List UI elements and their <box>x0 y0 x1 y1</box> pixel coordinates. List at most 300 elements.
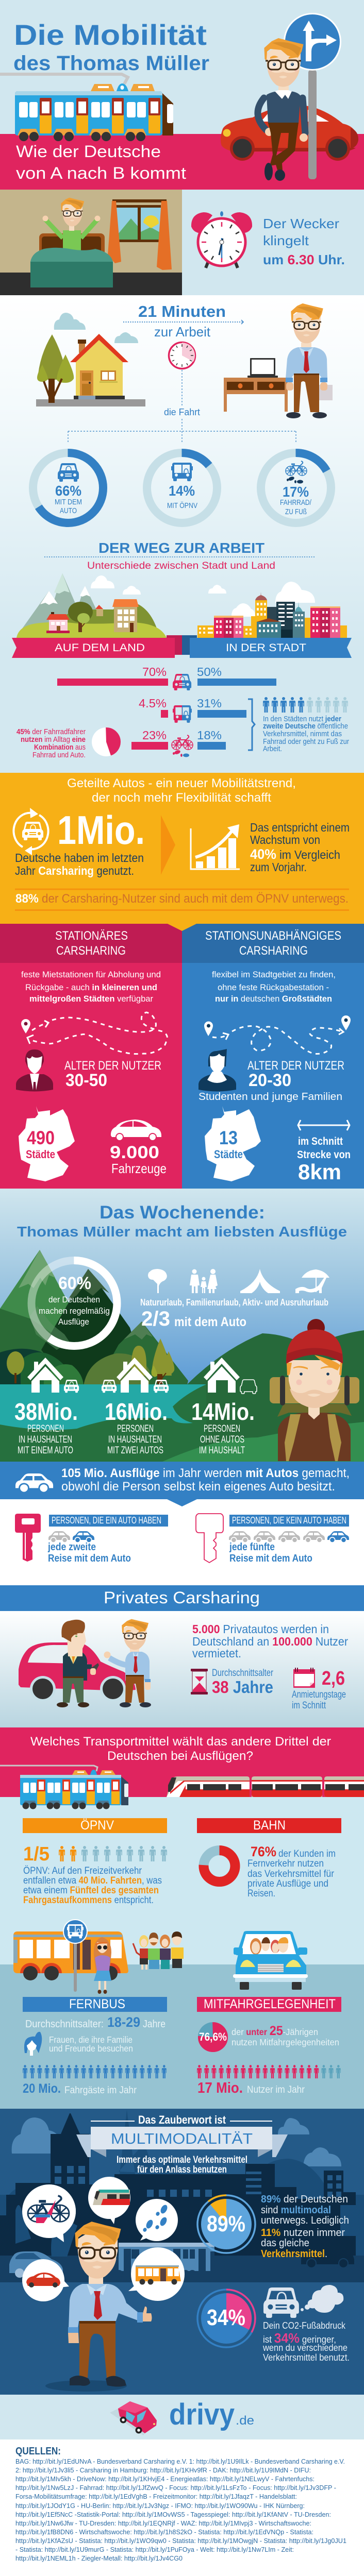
heading ribbon: MULTIMODALITÄT <box>111 2131 253 2147</box>
sources <box>15 2446 346 2562</box>
heading ribbon: für den Anlass benutzen <box>137 2164 227 2175</box>
ring chart: 60 percent: Ausflüge <box>58 1317 89 1327</box>
route map <box>21 1012 167 1054</box>
hero subtitle <box>16 142 186 182</box>
bedroom scene <box>0 190 182 295</box>
text <box>247 1844 336 1899</box>
text: private Ausflüge und <box>247 1878 328 1889</box>
donut: bike and walking 17%: 17% <box>283 484 309 500</box>
heading bar <box>0 1585 364 1611</box>
callout text <box>61 1466 350 1494</box>
donut: car 66% <box>33 453 103 523</box>
sources list: BAG: http://bit.ly/1EdUNvA - Bundesverband Carsharing e.V. 1: http://bit.ly/1U9IlLk - Bundesverband Carsharing e.V. <box>15 2458 345 2465</box>
note: bike and car: Kombination aus <box>34 743 86 752</box>
night skyline <box>0 2110 364 2282</box>
21 minutes heading: zur Arbeit <box>154 324 211 340</box>
stat: average age: Durchschnittsalter <box>212 1668 274 1679</box>
banner: city: IN DER STADT <box>226 642 306 654</box>
cars: every second <box>48 1531 94 1542</box>
arrow: distance <box>298 1120 350 1130</box>
wake-up text: um 6.30 Uhr. <box>263 252 345 267</box>
car row <box>57 668 276 690</box>
bubble: bike <box>22 2184 76 2242</box>
woman waiting <box>94 1937 111 1994</box>
bus stop sign <box>63 1919 88 1992</box>
heading <box>205 929 341 958</box>
note: cities: zweite Deutsche öffentliche <box>263 722 348 731</box>
growth text <box>250 821 350 874</box>
label <box>49 1515 168 1527</box>
stat: average age <box>212 1668 274 1697</box>
icon: family <box>190 1269 218 1293</box>
carsharing comparison section <box>0 924 364 1189</box>
note: cities: In den Städten nutzt jeder <box>263 715 341 723</box>
note: cities <box>263 715 349 753</box>
stat: 1 million <box>15 807 145 877</box>
heading bar: Privates Carsharing <box>104 1588 260 1607</box>
panel: public transport <box>23 1818 167 1906</box>
sources list: Forsa-Mobilitätsumfrage: http://bit.ly/1EdVghB - Freizeitmonitor: http://bit.ly/1JfaqzT - Handelsblatt: <box>15 2493 297 2500</box>
text: das Verkehrsmittel für <box>247 1869 335 1879</box>
hiker <box>270 1319 359 1461</box>
description <box>212 970 336 1004</box>
car row: 50% <box>197 665 222 679</box>
callout: 88 percent: 88% der Carsharing-Nutzer sind auch mit dem ÖPNV unterwegs. <box>15 892 349 906</box>
die Fahrt label: die Fahrt <box>164 407 200 417</box>
average age: Jahre <box>143 2019 166 2030</box>
private carsharing text: vermietet. <box>192 1647 241 1660</box>
speech bubbles: modes of transport <box>22 2177 185 2301</box>
multimodal text: Verkehrsmittel. <box>261 2248 327 2260</box>
icons: vacation types <box>148 1269 329 1293</box>
vacation text: mit dem Auto <box>174 1315 246 1329</box>
sources heading: QUELLEN: <box>15 2446 61 2457</box>
ride sharing text: der unter 25-Jährigen <box>231 2024 318 2038</box>
wake-up text: Der Wecker <box>263 216 339 231</box>
map: 13 cities <box>205 1106 261 1181</box>
header: ÖPNV <box>80 1818 114 1833</box>
stat: passengers: Fahrgäste im Jahr <box>64 2085 137 2096</box>
21 minutes heading: 21 Minuten <box>138 302 226 320</box>
bubble: car <box>22 2259 69 2301</box>
icon: outline key <box>196 1514 223 1563</box>
map: 490 cities <box>19 1106 75 1181</box>
icon: woman <box>24 2032 42 2056</box>
Thomas Müller leaning <box>258 38 308 181</box>
city illustration <box>197 582 347 638</box>
comparison chart <box>16 665 349 759</box>
note: cities: Fahrrad oder geht zu Fuß zur <box>263 738 349 746</box>
21 minutes heading <box>123 302 243 340</box>
header <box>23 1818 167 1833</box>
note: bike and car: nutzen im Alltag eine <box>21 736 86 744</box>
wake-up text <box>263 216 345 267</box>
red car <box>221 105 358 161</box>
panel: rail <box>197 1818 341 1899</box>
text: entfallen etwa 40 Mio. Fahrten, was <box>23 1875 162 1886</box>
stat: average age: 38 Jahre <box>212 1677 273 1697</box>
man with key <box>57 1620 99 1707</box>
route map <box>204 1015 351 1054</box>
bus row: 31% <box>197 697 222 710</box>
stat: rental days: im Schnitt <box>292 1700 326 1711</box>
stat: distance: Strecke von <box>297 1149 351 1161</box>
icon: solid key <box>15 1514 41 1562</box>
text <box>229 1541 312 1564</box>
header <box>23 1997 167 2012</box>
icon: tent <box>240 1269 280 1293</box>
banner: countryside <box>12 635 182 658</box>
wake-up panel <box>182 190 364 295</box>
long-distance bus <box>13 1931 128 1980</box>
pie: bike and car <box>92 727 121 756</box>
pie: 76.6 percent <box>198 2022 228 2052</box>
women text: Frauen, die ihre Familie <box>49 2035 133 2045</box>
text: etwa einem Fünftel des gesamten <box>23 1885 159 1896</box>
stat: 1 million: Jahr Carsharing genutzt. <box>15 864 134 877</box>
sources list: http://bit.ly/1KfAZsU - Statista: http://bit.ly/1WO9qw0 - Statista: http://bit.ly/1MOwgjN - Statista: http://bit.ly/1Jg0JU1 <box>15 2537 346 2545</box>
banner: countryside: AUF DEM LAND <box>55 642 145 654</box>
icon: drivy car <box>110 2401 157 2435</box>
weekend heading: Das Wochenende: <box>100 1202 265 1223</box>
stat: vehicles <box>110 1143 167 1176</box>
white background for key section <box>0 1499 364 1585</box>
icon: hourglass <box>191 1669 208 1694</box>
household: no car: IM HAUSHALT <box>199 1445 245 1456</box>
hero subtitle: Wie der Deutsche <box>16 142 161 161</box>
household: no car: OHNE AUTOS <box>200 1434 244 1445</box>
heading: CARSHARING <box>56 944 126 958</box>
weekend heading <box>17 1202 347 1240</box>
logo band <box>0 2395 364 2439</box>
average age: Durchschnittsalter: <box>25 2019 104 2030</box>
pink heading <box>0 1727 364 1797</box>
stat: one fifth: 1/5 <box>23 1843 49 1865</box>
people: every second German <box>263 697 348 713</box>
donut: public transport 14%: 14% <box>169 483 195 499</box>
stat: rental days <box>292 1668 346 1711</box>
sources list: http://bit.ly/1Ef5NcC -Statistik-Portal: http://bit.ly/1MOvWS5 - Tagesspiegel: http://bit.ly/1KfANtV - TU-Dresden: <box>15 2511 331 2518</box>
wake-up section <box>0 190 364 295</box>
private carsharing text: Deutschland an 100.000 Nutzer <box>192 1635 348 1648</box>
household: one car: IN HAUSHALTEN <box>19 1434 72 1445</box>
wake-up text: klingelt <box>263 233 309 248</box>
stat: vehicles: 9.000 <box>110 1143 159 1162</box>
note: cities: Arbeit. <box>263 745 282 753</box>
ride sharing text: nutzen Mitfahrgelegenheiten <box>231 2037 339 2047</box>
regional train: tram <box>0 1766 128 1809</box>
donut: car 66%: AUTO <box>60 506 77 515</box>
commute clock <box>169 342 195 369</box>
sources list: 2: http://bit.ly/1Jv3li5 - Carsharing in Hamburg: http://bit.ly/1KHv9fR - DAK: http://bit.ly/1U9IMdN - DIFU: <box>15 2466 311 2474</box>
people: 20 million passengers <box>23 2065 167 2078</box>
household: one car: 38Mio. <box>14 1398 78 1425</box>
heading ribbon: Immer das optimale Verkehrsmittel <box>117 2155 247 2165</box>
private carsharing text <box>192 1622 348 1660</box>
stat: 1 million: Deutsche haben im letzten <box>15 851 144 865</box>
household: one car: MIT EINEM AUTO <box>18 1445 73 1456</box>
icon: shared car <box>13 808 48 855</box>
pink heading: Deutschen bei Ausflügen? <box>107 1749 253 1763</box>
icon: calendar <box>293 1668 315 1688</box>
long-distance train <box>167 1776 364 1797</box>
multimodal text: 11% nutzen immer <box>261 2227 345 2239</box>
heading ribbon <box>76 2113 288 2175</box>
hero subtitle: von A nach B kommt <box>16 164 186 182</box>
weekend section <box>0 1189 364 1462</box>
map: 13 cities: 13 <box>219 1127 238 1148</box>
CO2 text: wenn du verschiedene <box>262 2343 348 2353</box>
description: Rückgabe - auch in kleineren und <box>25 982 157 992</box>
icon: car with exhaust cloud <box>263 2285 343 2318</box>
growth text: 40% im Vergleich <box>250 846 340 862</box>
multimodal text <box>261 2194 349 2260</box>
bus row <box>139 697 246 723</box>
household: no car: PERSONEN <box>204 1423 240 1434</box>
note: bike and car <box>16 728 86 759</box>
car row: 70% <box>142 665 167 679</box>
user age <box>64 1059 161 1090</box>
carpool car <box>233 1931 308 1990</box>
sources list: - Statista: http://bit.ly/1U9murG - Statista: http://bit.ly/1PuFOya - Welt: http://bit.ly/1Nw7LIm - Zeit: <box>15 2546 294 2553</box>
stat: one fifth <box>23 1843 167 1865</box>
average age <box>25 2014 166 2030</box>
stat: users: 17 Mio. <box>197 2080 243 2096</box>
multimodal text: sind multimodal <box>261 2205 331 2216</box>
stats background <box>0 649 364 773</box>
text: jede fünfte <box>229 1541 275 1553</box>
weekend heading: Thomas Müller macht am liebsten Ausflüge <box>17 1224 347 1240</box>
icon: car <box>15 1473 53 1492</box>
heading <box>55 929 128 958</box>
home illustration <box>36 313 145 406</box>
sources list: http://bit.ly/1NEML1h - Ziegler-Metall: http://bit.ly/1Jv4CG0 <box>15 2554 183 2562</box>
user age: ALTER DER NUTZER <box>64 1059 161 1073</box>
text: Reise mit dem Auto <box>229 1553 312 1564</box>
pink heading: Welches Transportmittel wählt das andere Drittel der <box>30 1735 331 1749</box>
panel: free-floating carsharing <box>182 924 364 1189</box>
pie chart: 89 percent <box>197 2195 255 2253</box>
text: jede zweite <box>47 1541 96 1553</box>
heading: way to work: DER WEG ZUR ARBEIT <box>98 540 264 556</box>
pink car <box>19 1642 136 1702</box>
cars: every fifth <box>229 1531 349 1542</box>
header: BAHN <box>253 1818 286 1833</box>
user age: 30-50 <box>65 1071 107 1090</box>
bubble: bus <box>128 2247 185 2301</box>
text <box>47 1541 131 1564</box>
user age <box>198 1059 344 1103</box>
map: 490 cities: Städte <box>26 1148 55 1161</box>
stat: rental days: Anmietungstage <box>292 1689 346 1700</box>
growth text: zum Vorjahr. <box>250 860 307 874</box>
bike row: 23% <box>142 728 167 742</box>
stat: passengers <box>23 2081 137 2096</box>
icon: tree <box>148 1269 167 1293</box>
growth text: Wachstum von <box>250 833 320 846</box>
pie chart: 34 percent <box>197 2290 255 2347</box>
icon: young user <box>198 1049 236 1091</box>
banner: city <box>182 635 352 658</box>
callout: 88 percent <box>15 888 349 911</box>
ring chart: 60 percent <box>31 1260 117 1346</box>
panel: stationary carsharing <box>0 924 182 1189</box>
sources list <box>15 2458 346 2562</box>
average age: 18-29 <box>107 2014 140 2030</box>
description: ohne feste Rückgabestation - <box>218 982 329 992</box>
heading ribbon: Das Zauberwort ist <box>138 2113 226 2126</box>
ring chart: 60 percent: der Deutschen <box>48 1295 100 1304</box>
tram illustration <box>0 74 173 141</box>
stat: distance <box>297 1136 351 1184</box>
panel: ride sharing <box>197 1997 341 2096</box>
other third section <box>0 1727 364 2109</box>
growth chart <box>191 824 240 869</box>
icon: vehicle <box>111 1120 161 1140</box>
heading: STATIONÄRES <box>55 929 128 943</box>
user age: 20-30 <box>249 1071 291 1090</box>
note: cities: Verkehrsmittel, nimmt das <box>263 730 342 738</box>
Thomas at work <box>286 303 333 418</box>
donut: bike and walking 17%: FAHRRAD/ <box>280 498 312 507</box>
multimodal text: 89% der Deutschen <box>261 2194 348 2205</box>
donut: bike and walking 17% <box>261 453 331 523</box>
description: nur in deutschen Großstädten <box>215 994 332 1004</box>
wordmark: drivy <box>169 2398 235 2431</box>
trend heading <box>67 776 296 805</box>
household: two cars <box>102 1358 169 1456</box>
bike row: 18% <box>197 728 222 742</box>
stat: passengers: 20 Mio. <box>23 2081 61 2096</box>
Thomas with thumbs <box>104 1619 151 1707</box>
label: PERSONEN, DIE EIN AUTO HABEN <box>52 1515 161 1526</box>
pie chart: 34 percent: 34% <box>207 2305 245 2330</box>
hero title <box>13 19 209 75</box>
header: FERNBUS <box>69 1997 125 2011</box>
heading: CARSHARING <box>239 944 308 958</box>
people: 17 million users <box>197 2065 341 2078</box>
CO2 text: Verkehrsmittel benutzt. <box>263 2352 350 2363</box>
alarm clock <box>191 211 252 268</box>
household: two cars: MIT ZWEI AUTOS <box>107 1445 163 1456</box>
trend heading: Geteilte Autos - ein neuer Mobilitätstrend, <box>67 776 296 790</box>
ride sharing text <box>231 2024 339 2047</box>
commute section <box>0 295 364 649</box>
header: MITFAHRGELEGENHEIT <box>204 1997 336 2011</box>
multimodality section <box>0 2109 364 2395</box>
map: 13 cities: Städte <box>214 1148 243 1161</box>
office desk and laptop <box>224 358 288 412</box>
icon: beach chair <box>295 1269 329 1293</box>
donut: 76 percent <box>204 1851 235 1882</box>
stat: users: Nutzer im Jahr <box>247 2084 305 2095</box>
heading: STATIONSUNABHÄNGIGES <box>205 929 341 943</box>
countryside illustration <box>16 573 167 638</box>
women text: und Freunde besuchen <box>49 2043 133 2054</box>
heading: way to work <box>44 540 315 571</box>
hero section <box>0 0 364 190</box>
note: bike and car: 45% der Fahrradfahrer <box>16 728 86 736</box>
donut: car 66%: 66% <box>55 483 81 499</box>
key panel: car owners <box>15 1514 168 1564</box>
household: no car: 14Mio. <box>191 1398 255 1425</box>
stat: rental days: 2,6 <box>322 1668 345 1689</box>
text: Reisen. <box>247 1888 275 1899</box>
CO2 text: Dein CO2-Fußabdruck <box>263 2320 346 2331</box>
hero title: Die Mobilität <box>14 19 207 51</box>
group of friends <box>133 1931 184 1970</box>
stat: 1 million: 1Mio. <box>57 807 145 853</box>
vacation text <box>140 1297 328 1330</box>
text: Fahrgastaufkommens entspricht. <box>23 1895 154 1906</box>
household: one car <box>14 1358 79 1456</box>
icon: older user <box>16 1049 53 1091</box>
donut: public transport 14% <box>147 453 217 523</box>
stat: distance: 8km <box>298 1160 341 1184</box>
description: flexibel im Stadtgebiet zu finden, <box>212 970 336 979</box>
carsharing trend section <box>0 773 364 924</box>
multimodal text: das gleiche <box>261 2238 309 2249</box>
household: two cars: PERSONEN <box>117 1423 154 1434</box>
commute connector <box>68 370 296 443</box>
vacation text: 2/3 <box>141 1308 170 1330</box>
sources list: http://bit.ly/1MIv5kh - DriveNow: http://bit.ly/1KHvjE4 - Energieatlas: http://bit.ly/1NELwyV - Fahrtenfuchs: <box>15 2475 315 2483</box>
household: no car <box>191 1358 257 1456</box>
stat: vehicles: Fahrzeuge <box>111 1161 167 1176</box>
description: feste Mietstationen für Abholung und <box>21 970 161 979</box>
header <box>197 1818 341 1833</box>
callout text: obwohl die Person selbst kein eigenes Auto besitzt. <box>61 1480 335 1494</box>
ring chart: 60 percent: 60% <box>58 1274 91 1293</box>
trips callout bar <box>0 1462 364 1506</box>
sources list: http://bit.ly/1Nw6Jfw - TU-Dresden: http://bit.ly/1EQNRjf - WAZ: http://bit.ly/1MIvpj3 - Wirtschaftswoche: <box>15 2519 311 2527</box>
multimodal text: unterwegs. Lediglich <box>261 2215 349 2226</box>
bubble: footprints <box>136 2199 178 2241</box>
bracket <box>248 699 255 750</box>
pie: 76.6 percent: 76,6% <box>199 2030 227 2043</box>
women text <box>49 2035 133 2054</box>
description <box>21 970 161 1004</box>
trend heading: der noch mehr Flexibilität schafft <box>92 791 271 805</box>
bike row <box>131 728 226 757</box>
description: mittelgroßen Städten verfügbar <box>29 994 153 1004</box>
text <box>23 1866 162 1906</box>
donut: car 66%: MIT DEM <box>55 498 82 506</box>
heading: way to work: Unterschiede zwischen Stadt und Land <box>87 561 275 571</box>
text: ÖPNV: Auf den Freizeitverkehr <box>23 1866 142 1876</box>
map: 490 cities: 490 <box>27 1127 55 1148</box>
CO2 text <box>262 2320 350 2363</box>
sources list: http://bit.ly/1Nw5LzJ - Fahrrad: http://bit.ly/1JfZwvQ - Focus: http://bit.ly/1LsFzTo - Focus: http://bit.ly/1Jv3DFP - <box>15 2484 336 2492</box>
sources list: http://bit.ly/1fB8DN6 - Wirtschaftswoche: http://bit.ly/1h8S2kO - Statista: http://bit.ly/1EdVNQp - Statista: <box>15 2528 313 2536</box>
text: 76% <box>251 1844 276 1859</box>
panel: long-distance bus <box>23 1997 167 2096</box>
bus row: 4.5% <box>139 697 167 710</box>
note: bike and car: Fahrrad und Auto. <box>32 751 86 759</box>
Thomas thumbs up <box>45 2222 152 2392</box>
sources list: http://bit.ly/1JOdY1G - HU-Berlin: http://bit.ly/1Jv3Ngz - IFMO: http://bit.ly/1WO90Wu - IHK Nürnberg: <box>15 2502 305 2510</box>
user age: Studenten und junge Familien <box>198 1091 342 1103</box>
ring chart: 60 percent: machen regelmäßig <box>39 1306 110 1316</box>
donut: public transport 14%: MIT ÖPNV <box>167 501 197 510</box>
private carsharing section <box>0 1585 364 1727</box>
landscape <box>0 1250 364 1462</box>
text: der Kunden im <box>278 1849 336 1859</box>
wordmark: .de <box>236 2414 254 2428</box>
CO2 text: ist 34% geringer, <box>263 2330 336 2346</box>
household: two cars: IN HAUSHALTEN <box>108 1434 162 1445</box>
growth text: Das entspricht einem <box>250 821 350 834</box>
